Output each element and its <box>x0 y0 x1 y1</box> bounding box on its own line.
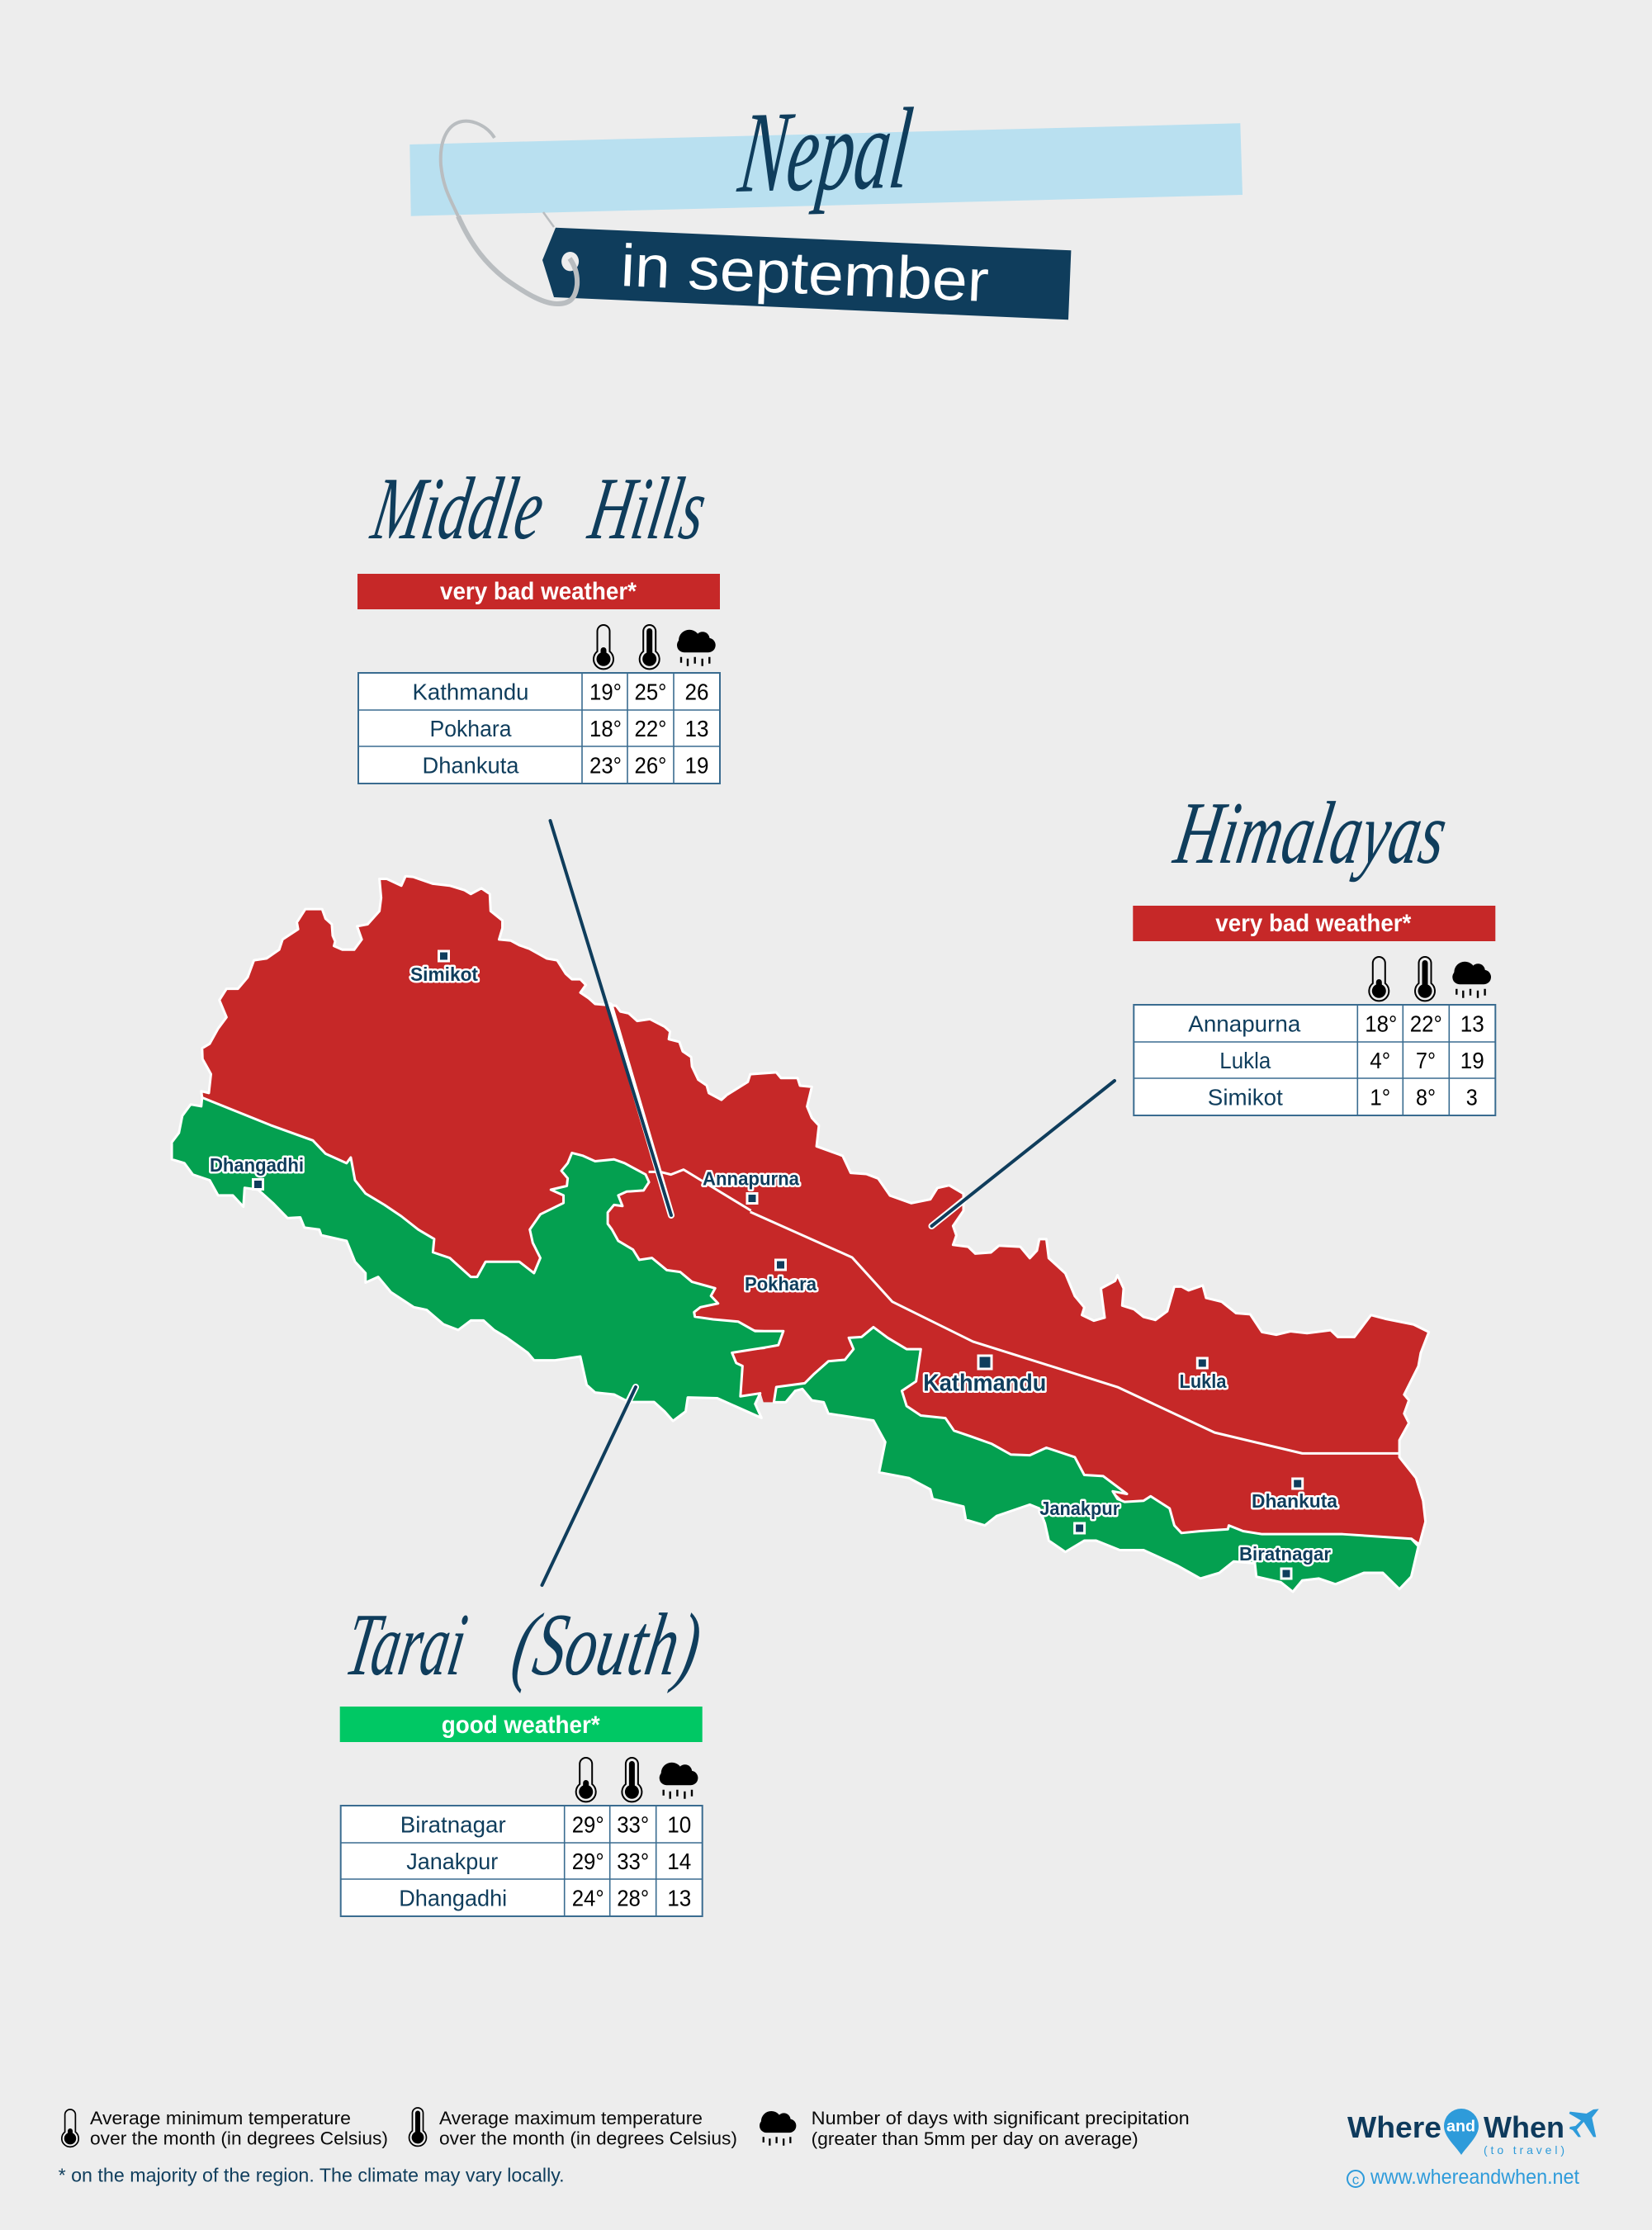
tag string <box>543 212 554 227</box>
city marker: Janakpur: Janakpur <box>1039 1498 1119 1519</box>
leader: Middle Hills to map <box>550 821 671 1215</box>
heading: Himalayas: Himalayas <box>1167 784 1454 883</box>
climate table: Janakpur <box>406 1849 498 1874</box>
city marker: Janakpur <box>1039 1498 1119 1533</box>
heading: Tarai: Tarai <box>339 1595 474 1694</box>
icon: minimum temperature <box>576 1758 596 1802</box>
climate table <box>1134 1005 1495 1115</box>
border between Himalayas and Middle Hills, west <box>649 1170 751 1210</box>
city marker: Dhankuta <box>1252 1479 1337 1512</box>
weather banner: good weather* <box>442 1712 600 1739</box>
north border west <box>201 876 727 1100</box>
heading: Middle: Middle <box>364 459 551 558</box>
city marker: Pokhara: Pokhara <box>745 1273 817 1295</box>
climate table: 26° <box>634 753 667 778</box>
climate table: 1° <box>1370 1085 1390 1110</box>
climate table: Dhankuta <box>423 753 519 778</box>
climate table: 13 <box>667 1886 691 1910</box>
city marker: Dhangadhi: Dhangadhi <box>210 1154 304 1176</box>
panel: Middle Hills <box>357 459 720 784</box>
heading: Hills: Hills <box>582 459 713 558</box>
city marker: Pokhara <box>745 1260 817 1295</box>
region: Tarai west <box>172 1097 783 1421</box>
icon: maximum temperature <box>640 625 660 669</box>
logo word: When: When <box>1484 2110 1564 2144</box>
weather banner <box>340 1707 703 1742</box>
climate table: 13 <box>1460 1011 1484 1037</box>
copyright mark <box>1347 2171 1364 2188</box>
border between Himalayas and Middle Hills, east <box>750 1212 1399 1453</box>
climate table: 29° <box>572 1812 604 1838</box>
climate table: 19 <box>685 753 708 778</box>
climate table: 19° <box>589 679 622 705</box>
climate table: 33° <box>617 1849 649 1874</box>
city marker: Kathmandu: Kathmandu <box>923 1371 1046 1397</box>
climate table: 23° <box>589 753 622 778</box>
leader: Tarai to map <box>542 1387 636 1585</box>
climate table <box>358 673 720 784</box>
map of Nepal <box>172 876 1429 1592</box>
icon: minimum temperature <box>1369 957 1389 1001</box>
tag ring <box>441 121 577 304</box>
city marker: Dhankuta: Dhankuta <box>1252 1490 1337 1512</box>
weather banner <box>1133 906 1495 941</box>
icon: maximum temperature <box>622 1758 641 1802</box>
panel: Tarai (South) <box>339 1595 708 1916</box>
climate table <box>341 1806 703 1916</box>
city marker: Lukla <box>1179 1358 1227 1392</box>
subtitle tag <box>542 228 1071 320</box>
city marker: Lukla: Lukla <box>1179 1371 1227 1392</box>
city marker: Annapurna: Annapurna <box>703 1167 799 1189</box>
climate table: 29° <box>572 1849 604 1874</box>
title band <box>409 123 1243 216</box>
legend text: minimum temperature: over the month (in degrees Celsius) <box>90 2128 388 2148</box>
climate table: 24° <box>572 1886 604 1910</box>
city marker: Biratnagar <box>1239 1543 1331 1579</box>
legend <box>59 2108 1190 2186</box>
panel: Himalayas <box>1133 784 1495 1115</box>
icon: rain days <box>660 1763 698 1799</box>
legend text: rain days: Number of days with significant precipitation <box>812 2108 1190 2128</box>
legend icon: rain days <box>760 2111 796 2146</box>
icon: maximum temperature <box>1415 957 1435 1001</box>
title: Nepal: Nepal <box>732 85 918 217</box>
climate table: 8° <box>1416 1085 1436 1110</box>
climate table: 10 <box>667 1812 691 1838</box>
climate table: Biratnagar <box>400 1812 506 1838</box>
climate table: 22° <box>1410 1011 1442 1037</box>
climate table: 25° <box>634 679 667 705</box>
climate table: 3 <box>1466 1085 1478 1110</box>
logo icon: plane <box>1569 2109 1599 2137</box>
city marker: Dhangadhi <box>210 1154 304 1189</box>
climate table: 22° <box>634 716 667 741</box>
region: himalayas and middle hills, east part <box>727 1072 1429 1545</box>
legend icon: maximum temperature <box>409 2108 426 2146</box>
region: Tarai east <box>774 1327 1418 1592</box>
logo tagline: (to travel) <box>1484 2143 1564 2157</box>
climate table: Kathmandu <box>413 679 528 705</box>
city marker: Simikot: Simikot <box>410 963 478 985</box>
leader: Himalayas to map <box>931 1081 1115 1226</box>
climate table: 19 <box>1460 1048 1484 1073</box>
city marker: Kathmandu <box>923 1356 1046 1397</box>
city marker: Biratnagar: Biratnagar <box>1239 1543 1331 1565</box>
logo word: and: and <box>1446 2119 1475 2136</box>
website: www.whereandwhen.net <box>1370 2166 1579 2189</box>
tag hole <box>561 252 579 271</box>
climate table: 26 <box>685 679 708 705</box>
climate table: 18° <box>589 716 622 741</box>
climate table: Lukla <box>1219 1048 1271 1073</box>
climate table: 14 <box>667 1849 691 1874</box>
climate table: 7° <box>1416 1048 1436 1073</box>
climate table: Simikot <box>1208 1085 1283 1110</box>
climate table: 28° <box>617 1886 649 1910</box>
climate table: Pokhara <box>429 716 512 741</box>
weather banner <box>357 574 720 609</box>
climate table: Dhangadhi <box>399 1886 507 1910</box>
legend text: minimum temperature: Average minimum temperature <box>90 2108 351 2128</box>
icon: rain days <box>677 630 716 666</box>
climate table: Annapurna <box>1188 1011 1301 1037</box>
climate table: 13 <box>685 716 708 741</box>
weather banner: very bad weather* <box>1215 910 1412 937</box>
legend text: rain days: (greater than 5mm per day on average) <box>812 2128 1138 2149</box>
city marker: Annapurna <box>703 1167 799 1204</box>
legend icon: minimum temperature <box>62 2109 78 2147</box>
heading: (South): (South) <box>506 1595 708 1694</box>
climate table: 18° <box>1365 1011 1397 1037</box>
title block <box>409 85 1243 320</box>
weather banner: very bad weather* <box>440 578 637 605</box>
legend text: maximum temperature: Average maximum temperature <box>439 2108 703 2128</box>
icon: rain days <box>1452 962 1491 998</box>
copyright mark: c <box>1352 2171 1360 2188</box>
logo: Where and When <box>1347 2109 1599 2189</box>
footnote: * on the majority of the region. The climate may vary locally. <box>59 2165 565 2186</box>
logo icon: map pin <box>1444 2109 1479 2155</box>
icon: minimum temperature <box>594 625 613 669</box>
climate table: 33° <box>617 1812 649 1838</box>
subtitle: in september: in september <box>619 233 990 315</box>
legend text: maximum temperature: over the month (in degrees Celsius) <box>439 2128 737 2148</box>
climate table: 4° <box>1370 1048 1390 1073</box>
city marker: Simikot <box>410 951 478 985</box>
logo word: Where: Where <box>1347 2110 1441 2144</box>
north and east border east <box>727 1072 1429 1545</box>
region: north and middle hills, west part <box>201 876 738 1322</box>
